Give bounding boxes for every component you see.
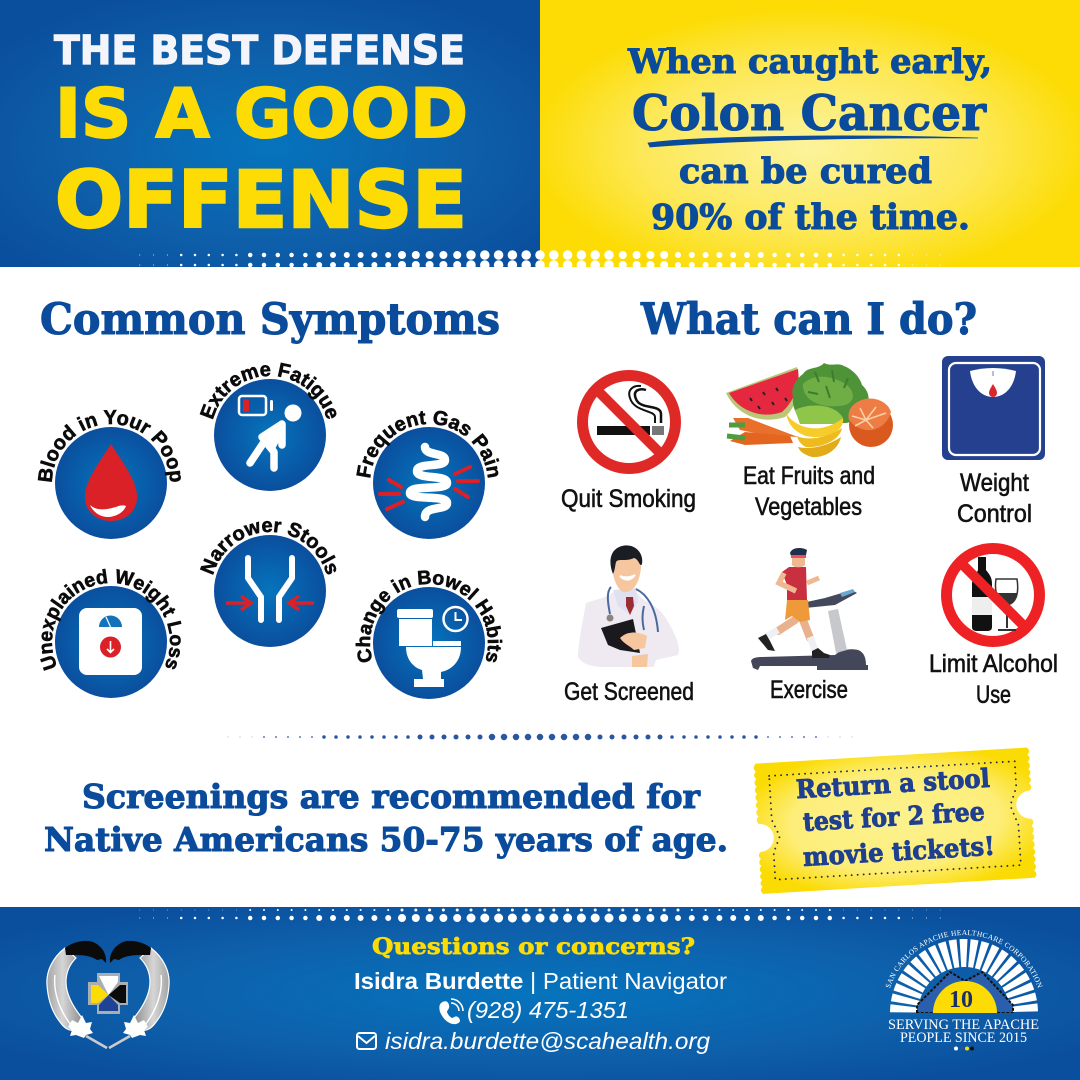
action: limit alcohol use: Use bbox=[976, 681, 1011, 709]
symptom: extreme fatigue bbox=[200, 362, 336, 491]
icon: tired person with low battery bbox=[239, 396, 302, 468]
right feather bbox=[109, 941, 169, 1048]
icon: fruit and vegetable pile bbox=[726, 363, 893, 457]
symptom: narrower stools: Narrower Stools bbox=[200, 520, 336, 575]
footer question heading: Questions or concerns? bbox=[372, 934, 695, 960]
icon: toilet and clock bbox=[397, 607, 468, 687]
heading: what can I do: What can I do? bbox=[640, 295, 977, 345]
icon: bathroom scale bbox=[79, 608, 142, 675]
contact name: Isidra Burdette | Patient Navigator bbox=[354, 968, 727, 994]
logo: tagline line 1: SERVING THE APACHE bbox=[888, 1017, 1039, 1033]
logo: four colour dots bbox=[954, 1046, 974, 1050]
icon: no alcohol sign bbox=[946, 548, 1040, 642]
icon: narrowing passage with arrows bbox=[226, 558, 314, 620]
footer panel bbox=[0, 907, 1080, 1080]
action: limit alcohol use: Limit Alcohol bbox=[929, 650, 1058, 678]
screening recommendation text bbox=[44, 777, 728, 859]
callout: movie ticket: test for 2 free bbox=[802, 797, 986, 838]
screening recommendation text: Native Americans 50-75 years of age. bbox=[44, 820, 728, 859]
action: eat fruits and vegetables: Eat Fruits and bbox=[743, 462, 875, 490]
icon: blood drop bbox=[85, 444, 137, 521]
action: quit smoking bbox=[561, 376, 696, 513]
action: limit alcohol use bbox=[929, 548, 1058, 709]
icon: doctor bbox=[578, 545, 679, 667]
action: eat fruits and vegetables bbox=[726, 363, 893, 521]
icon: envelope bbox=[357, 1033, 376, 1049]
cure text line 3: 90% of the time. bbox=[651, 197, 970, 238]
symptom: narrower stools bbox=[200, 520, 336, 647]
title: offense: OFFENSE bbox=[55, 156, 467, 246]
heading: common symptoms: Common Symptoms bbox=[40, 295, 500, 345]
logo: feather heart bbox=[47, 941, 169, 1048]
logo: San Carlos Apache Healthcare bbox=[886, 930, 1042, 1050]
logo: tagline line 2: PEOPLE SINCE 2015 bbox=[900, 1030, 1027, 1046]
email address: isidra.burdette@scahealth.org bbox=[385, 1028, 710, 1054]
action: quit smoking: Quit Smoking bbox=[561, 485, 696, 513]
symptom: frequent gas pain: Frequent Gas Pain bbox=[356, 410, 500, 478]
callout: movie ticket bbox=[753, 747, 1037, 894]
icon: no smoking sign bbox=[582, 376, 676, 468]
title: the best defense: THE BEST DEFENSE bbox=[54, 28, 465, 74]
icon: intestines with pain marks bbox=[380, 447, 478, 517]
action: weight control bbox=[942, 356, 1045, 528]
title: is a good: IS A GOOD bbox=[55, 75, 468, 154]
header panel: blue bbox=[0, 0, 540, 267]
cure text line 1: When caught early, bbox=[627, 42, 992, 82]
cross emblem bbox=[88, 973, 128, 1014]
action: exercise bbox=[751, 548, 868, 704]
icon: blue scale bbox=[942, 356, 1045, 460]
icon: runner on treadmill bbox=[751, 548, 868, 670]
left feather bbox=[47, 941, 107, 1048]
colon cancer heading: Colon Cancer bbox=[632, 84, 987, 142]
cure text line 2: can be cured bbox=[679, 151, 932, 192]
logo: 10 years mark: 10 bbox=[949, 987, 973, 1013]
action: weight control: Weight bbox=[960, 469, 1029, 497]
symptom: frequent gas pain bbox=[356, 410, 500, 539]
header panel: yellow bbox=[540, 0, 1080, 267]
symptom: change in bowel habits: Change in Bowel Habits bbox=[356, 570, 502, 662]
action: get screened bbox=[564, 545, 694, 706]
icon: phone bbox=[439, 999, 463, 1024]
symptom: blood in your poop bbox=[38, 410, 181, 539]
symptom: extreme fatigue: Extreme Fatigue bbox=[200, 362, 336, 420]
phone number: (928) 475-1351 bbox=[467, 997, 629, 1023]
underline swoosh bbox=[648, 136, 978, 147]
action: eat fruits and vegetables: Vegetables bbox=[755, 493, 862, 521]
screening recommendation text: Screenings are recommended for bbox=[82, 777, 701, 816]
symptom: blood in your poop: Blood in Your Poop bbox=[38, 410, 181, 482]
action: get screened: Get Screened bbox=[564, 678, 694, 706]
callout: movie ticket: movie tickets! bbox=[802, 832, 996, 873]
callout: movie ticket: Return a stool bbox=[795, 764, 991, 805]
action: exercise: Exercise bbox=[770, 676, 848, 704]
action: weight control: Control bbox=[957, 500, 1032, 528]
logo: arc name: SAN CARLOS APACHE HEALTHCARE CORPORATION bbox=[886, 930, 1042, 988]
symptom: unexplained weight loss: Unexplained Weight Loss bbox=[40, 568, 182, 671]
